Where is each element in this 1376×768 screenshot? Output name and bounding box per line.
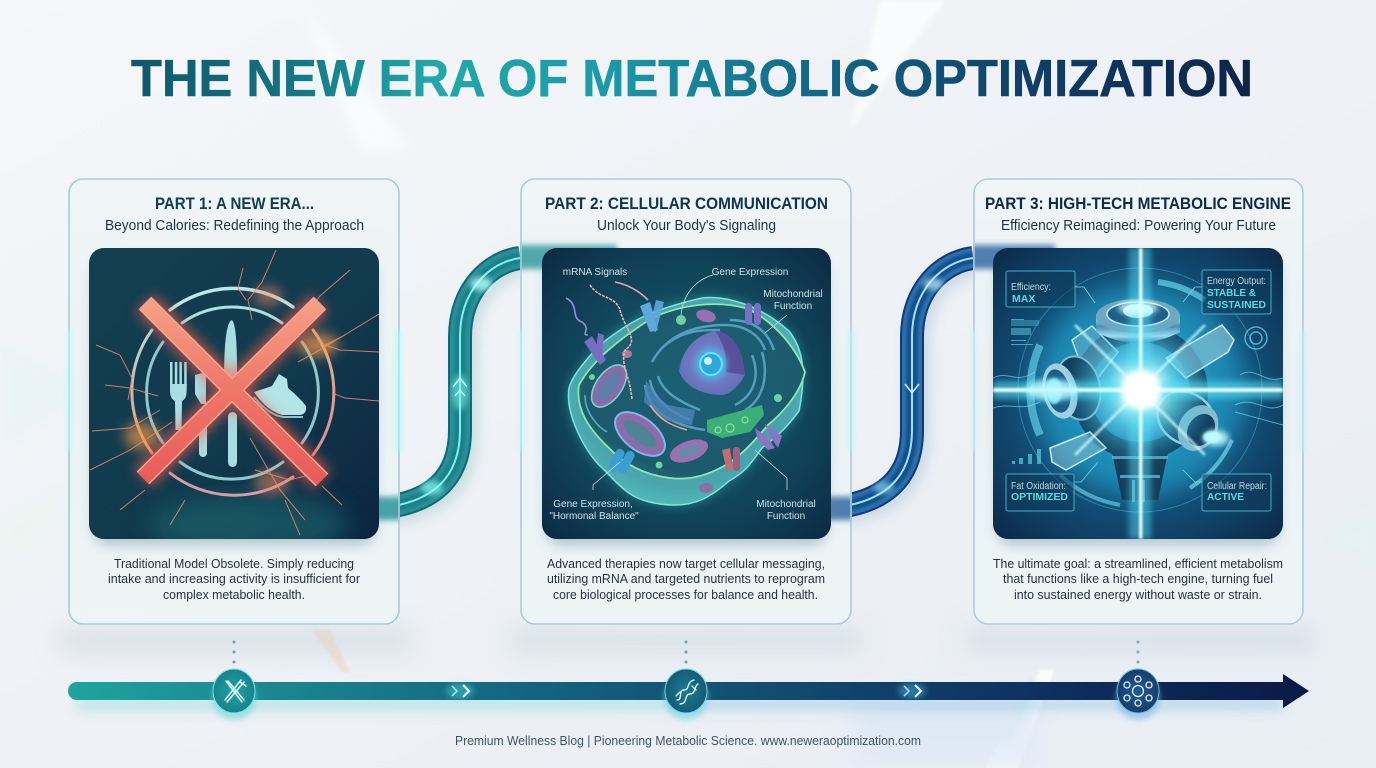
engine stat: energy output: Energy Output: <box>1207 276 1266 287</box>
engine stat: fat oxidation <box>1011 482 1068 500</box>
dotted links from panels to timeline <box>232 640 1140 664</box>
part 2 description: Advanced therapies now target cellular messaging, <box>547 556 825 571</box>
engine stat: fat oxidation: OPTIMIZED <box>1011 491 1068 503</box>
footer: Premium Wellness Blog | Pioneering Metabolic Science. www.neweraoptimization.com <box>455 734 921 748</box>
engine stat: energy output <box>1207 277 1266 308</box>
part 2 description: core biological processes for balance and health. <box>553 587 818 602</box>
part 1 description: intake and increasing activity is insufficient for <box>108 571 361 586</box>
timeline arrow <box>68 669 1309 720</box>
part 2 heading: PART 2: CELLULAR COMMUNICATION <box>545 195 828 213</box>
icon: fork <box>170 362 187 430</box>
part 3 description <box>993 556 1283 602</box>
receptors <box>640 300 664 332</box>
engine stat: efficiency: MAX <box>1012 293 1035 305</box>
engine stat: cellular repair: ACTIVE <box>1207 491 1244 503</box>
engine stat: energy output: STABLE & <box>1207 287 1256 299</box>
engine stat: energy output: SUSTAINED <box>1207 299 1266 311</box>
image: cell diagram <box>542 248 831 545</box>
panel: part 2 <box>512 178 859 625</box>
chevrons <box>446 683 926 699</box>
part 3 description: into sustained energy without waste or strain. <box>1014 587 1262 602</box>
nucleus <box>679 331 745 395</box>
engine stat: efficiency: Efficiency: <box>1011 282 1051 293</box>
lower left pipe <box>1050 432 1106 470</box>
part 1 subtitle: Beyond Calories: Redefining the Approach <box>105 218 364 234</box>
cell labels <box>549 267 823 522</box>
cell labels: mRNA Signals <box>563 267 627 278</box>
engine body <box>1038 299 1234 502</box>
part 3 heading: PART 3: HIGH-TECH METABOLIC ENGINE <box>985 195 1291 213</box>
part 2 subtitle: Unlock Your Body's Signaling <box>597 218 776 234</box>
right bearing <box>1156 392 1221 451</box>
node: gear molecule <box>1116 669 1160 720</box>
part 3 description: that functions like a high-tech engine, turning fuel <box>1003 571 1273 586</box>
upper left housing <box>1072 326 1118 378</box>
cell labels: Gene Expression, <box>553 499 633 510</box>
icon: red cross-out <box>143 303 322 480</box>
part 2 description: utilizing mRNA and targeted nutrients to reprogram <box>547 571 825 586</box>
cell labels: Gene Expression <box>712 267 788 278</box>
title: THE NEW ERA OF METABOLIC OPTIMIZATION <box>131 50 1253 108</box>
top cylinder <box>1096 299 1180 343</box>
cell labels: Function <box>774 301 812 312</box>
upper right pipe <box>1166 325 1234 378</box>
node: fork and knife <box>212 669 256 720</box>
part 1 heading: PART 1: A NEW ERA... <box>155 195 314 213</box>
lower stem <box>1112 452 1168 500</box>
panel: part 1 <box>67 178 406 625</box>
part 1 description: complex metabolic health. <box>163 587 305 602</box>
image: metabolic engine <box>993 248 1283 545</box>
icon: running shoe <box>254 374 306 415</box>
part 1 description <box>108 556 361 602</box>
node: DNA <box>664 669 708 720</box>
mitochondria <box>585 308 717 493</box>
engine stat: cellular repair: Cellular Repair: <box>1207 481 1267 492</box>
green reticulum <box>707 405 764 438</box>
part 3 subtitle: Efficiency Reimagined: Powering Your Future <box>1001 218 1276 234</box>
connector: part 2 to part 3 <box>831 258 979 514</box>
cell labels: Function <box>767 511 805 522</box>
connector: part 1 to part 2 <box>380 258 526 514</box>
part 2 description <box>547 556 825 602</box>
engine stat: efficiency <box>1012 282 1050 302</box>
cell labels: "Hormonal Balance" <box>549 511 639 522</box>
panel: part 3 <box>965 178 1305 625</box>
engine stat: fat oxidation: Fat Oxidation: <box>1011 481 1066 492</box>
image: crossed-out diet and exercise <box>89 248 379 555</box>
cell labels: Mitochondrial <box>763 289 823 300</box>
left bearing <box>1042 355 1102 421</box>
icon: knives <box>195 320 237 467</box>
engine stat: cellular repair <box>1207 482 1266 500</box>
part 1 description: Traditional Model Obsolete. Simply reducing <box>114 556 354 571</box>
small chart and data marks <box>1011 319 1041 464</box>
inner cell membrane <box>578 304 805 479</box>
part 3 description: The ultimate goal: a streamlined, efficient metabolism <box>993 556 1283 571</box>
light flare <box>993 248 1283 539</box>
cell labels: Mitochondrial <box>756 499 816 510</box>
